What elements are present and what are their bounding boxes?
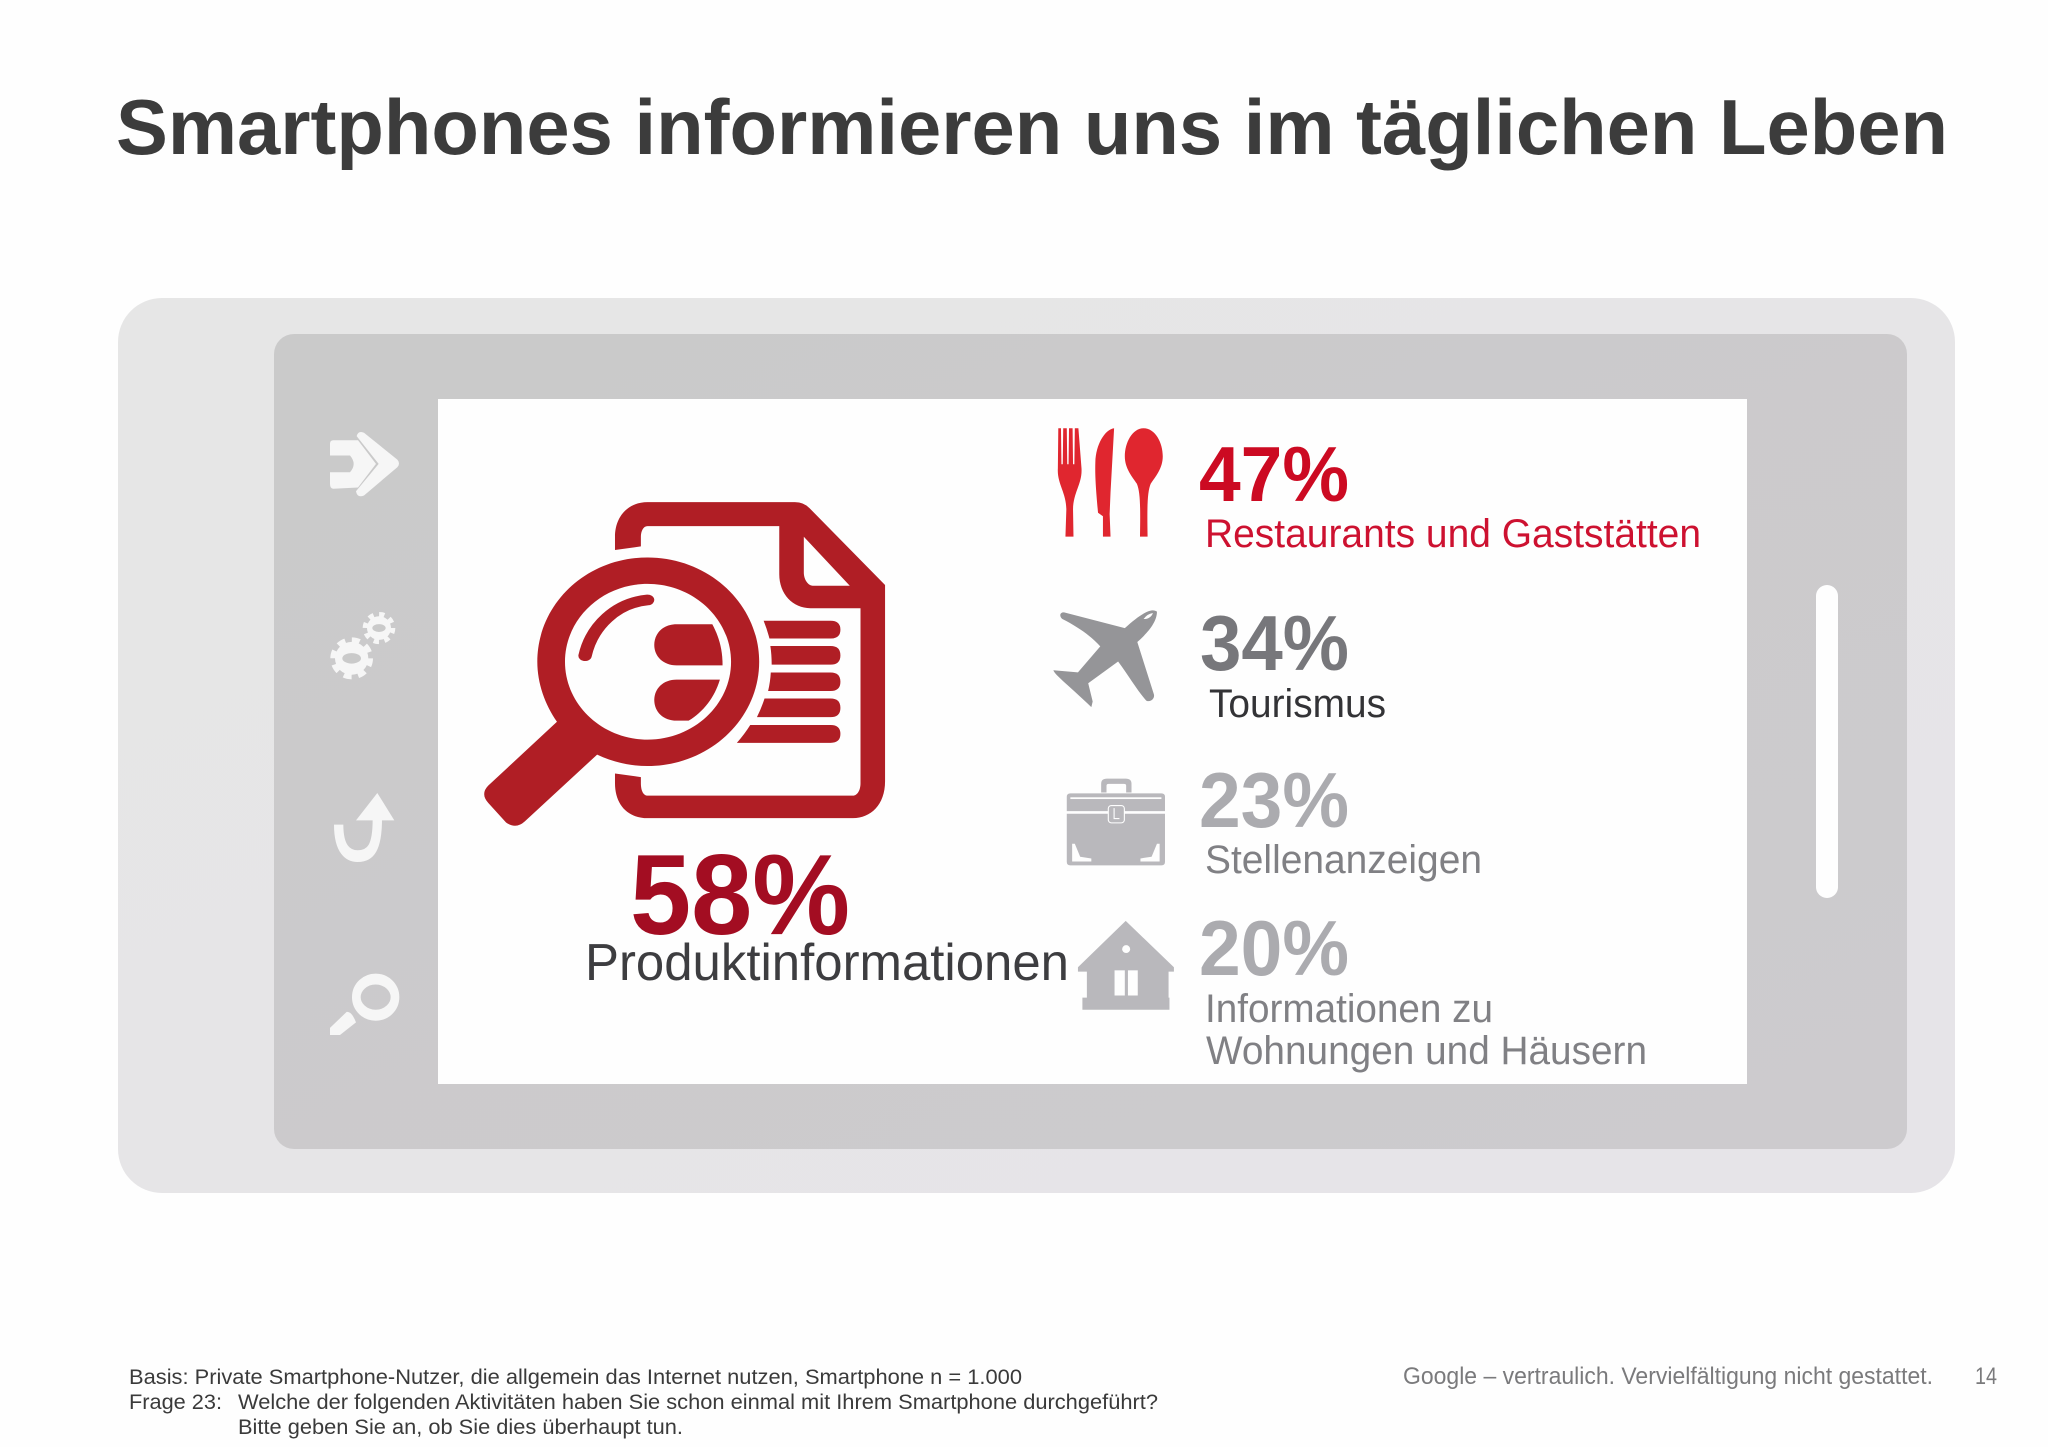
phone side button [1816, 585, 1838, 898]
label: Informationen zu Wohnungen und Häusern [1205, 987, 1647, 1073]
icon: gears [333, 614, 393, 677]
stat: 47%: 47% [1199, 430, 1349, 518]
phone inner bezel [274, 334, 1907, 1149]
icon: return arrow [339, 793, 394, 856]
phone screen [438, 399, 1747, 1084]
stat: 20%: 20% [1199, 904, 1349, 992]
label: Informationen zu Wohnungen und Häusern: Wohnungen und Häusern [1206, 1029, 1647, 1073]
icon: briefcase [1067, 779, 1165, 865]
title: Smartphones informieren uns im täglichen Leben [116, 83, 1948, 171]
stat: 23%: 23% [1199, 756, 1349, 844]
stat: 34%: 34% [1200, 599, 1349, 687]
label: Restaurants und Gaststätten: Restaurants und Gaststätten [1205, 512, 1701, 556]
phone outer body [118, 298, 1955, 1193]
icon: document with magnifier [484, 502, 885, 826]
stat: 58%: 58% [630, 832, 850, 959]
icon: search [330, 979, 395, 1035]
icon: house [1078, 921, 1174, 1010]
icon: airplane [1053, 610, 1157, 707]
icon: cutlery [1058, 428, 1163, 537]
icon: forward arrow [330, 432, 399, 496]
label: Tourismus: Tourismus [1209, 682, 1386, 726]
footnote: base and question: Bitte geben Sie an, ob Sie dies überhaupt tun. [238, 1415, 683, 1439]
label: Stellenanzeigen: Stellenanzeigen [1205, 838, 1482, 882]
label: Informationen zu Wohnungen und Häusern: Informationen zu [1205, 987, 1493, 1031]
footer: page number: 14 [1975, 1363, 1997, 1390]
footnote: base and question: Basis: Private Smartphone-Nutzer, die allgemein das Internet nutzen, Smartphone n = 1.000 [129, 1365, 1022, 1389]
label: Produktinformationen: Produktinformationen [585, 934, 1069, 992]
footnote: base and question: Welche der folgenden Aktivitäten haben Sie schon einmal mit Ihrem Smartphone durchgeführt? [238, 1390, 1158, 1414]
footnote: base and question: Frage 23: [129, 1390, 222, 1414]
footer: confidentiality notice: Google – vertraulich. Vervielfältigung nicht gestattet. [1403, 1363, 1933, 1390]
footnote: base and question [129, 1365, 1158, 1439]
panel: smartphone frame [118, 298, 1955, 1193]
